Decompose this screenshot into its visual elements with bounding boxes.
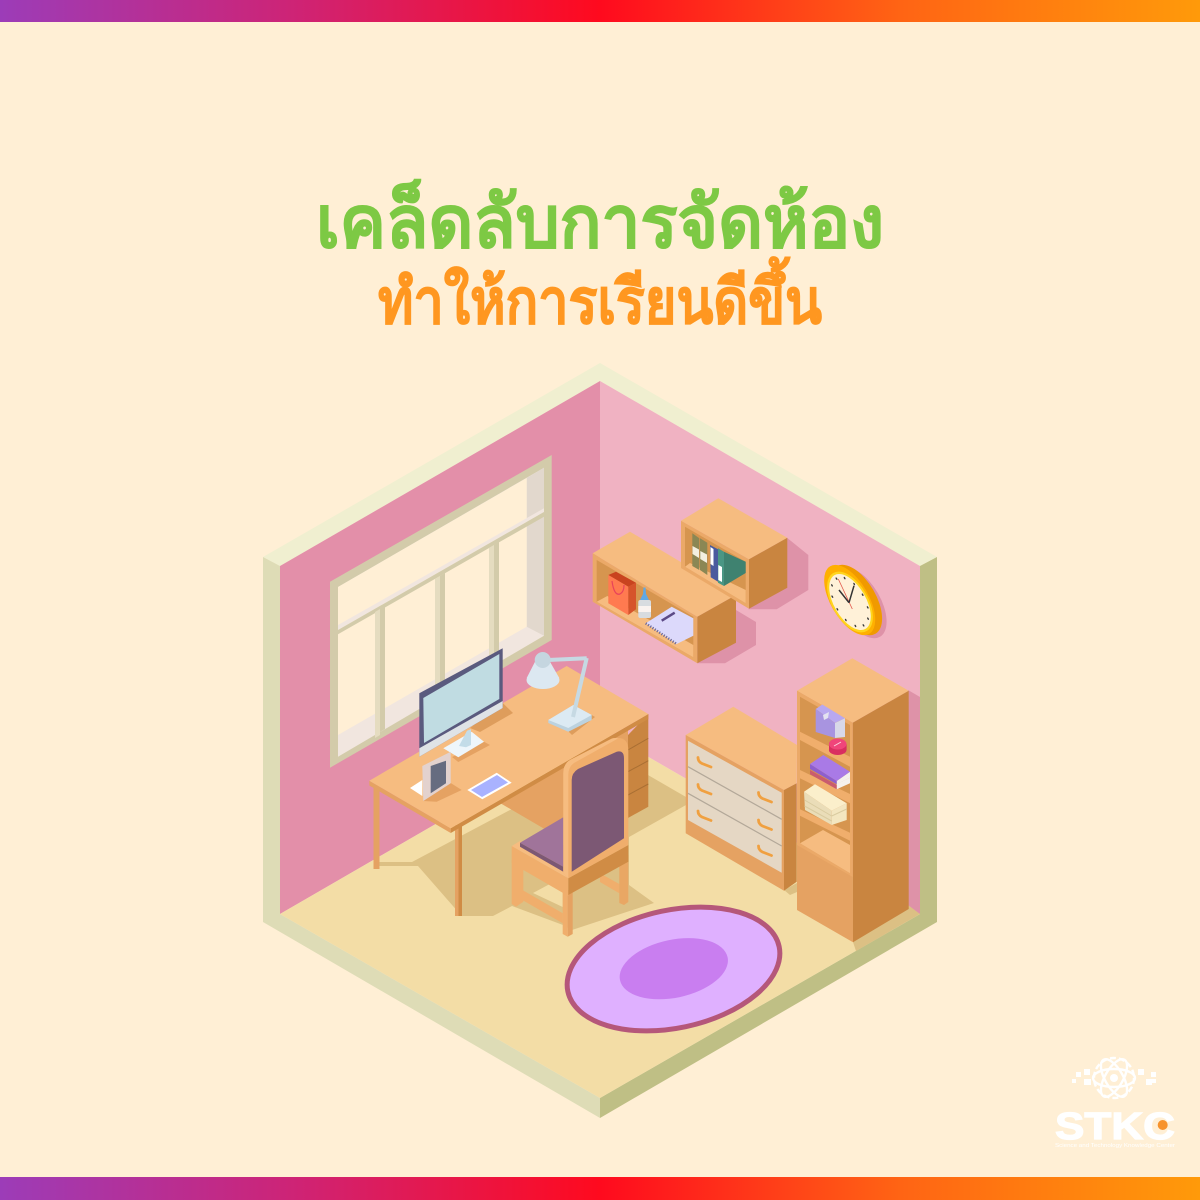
smartphone: [467, 773, 512, 799]
isometric room illustration: [263, 363, 937, 1118]
icon: glue bottle: [638, 588, 651, 618]
photo frame: [410, 752, 462, 802]
desk legs: [374, 785, 462, 916]
window: [330, 455, 552, 768]
top gradient bar: [0, 0, 1200, 22]
desk drawer pedestal: [500, 714, 648, 838]
computer monitor: [419, 648, 513, 762]
upper wall shelf: [681, 498, 787, 609]
wall shelf shadows: [697, 538, 920, 914]
floor shadows: [378, 770, 920, 951]
STKC logo: [1055, 1055, 1175, 1149]
wall clock: [814, 556, 897, 647]
lower wall shelf: [593, 532, 736, 663]
chair: [512, 738, 628, 937]
icon: stacked books: [810, 755, 850, 789]
icon: cream books: [804, 784, 847, 825]
chair legs: [512, 855, 628, 937]
heading line 2: ทำให้การเรียนดีขึ้น: [378, 256, 822, 337]
logo wordmark: STKC: [1055, 1106, 1175, 1148]
drawer handles: [698, 758, 772, 856]
dresser: [686, 707, 797, 891]
icon: binders: [692, 533, 746, 586]
icon: shopping bag: [608, 572, 636, 615]
room shell: [263, 363, 937, 1118]
chair seat cushion: [520, 817, 572, 872]
rug: [556, 889, 791, 1049]
title: [316, 179, 884, 337]
bookcase: [797, 658, 909, 942]
icon: red tin: [829, 738, 847, 755]
desk: [369, 666, 648, 916]
heading line 1: เคล็ดลับการจัดห้อง: [316, 179, 884, 263]
logo orange dot: [1158, 1120, 1168, 1130]
icon: purple box: [816, 704, 845, 738]
floor patch under chair: [533, 883, 563, 907]
icon: spiral notebook: [646, 607, 693, 644]
bottom gradient bar: [0, 1177, 1200, 1200]
logo atom mark: [1093, 1055, 1135, 1101]
dresser drawers: [688, 741, 782, 873]
chair backrest: [563, 738, 628, 878]
logo pixel squares: [1072, 1069, 1156, 1085]
desk lamp: [526, 652, 595, 735]
logo tagline: Science and Technology Knowledge Center: [1055, 1143, 1175, 1149]
